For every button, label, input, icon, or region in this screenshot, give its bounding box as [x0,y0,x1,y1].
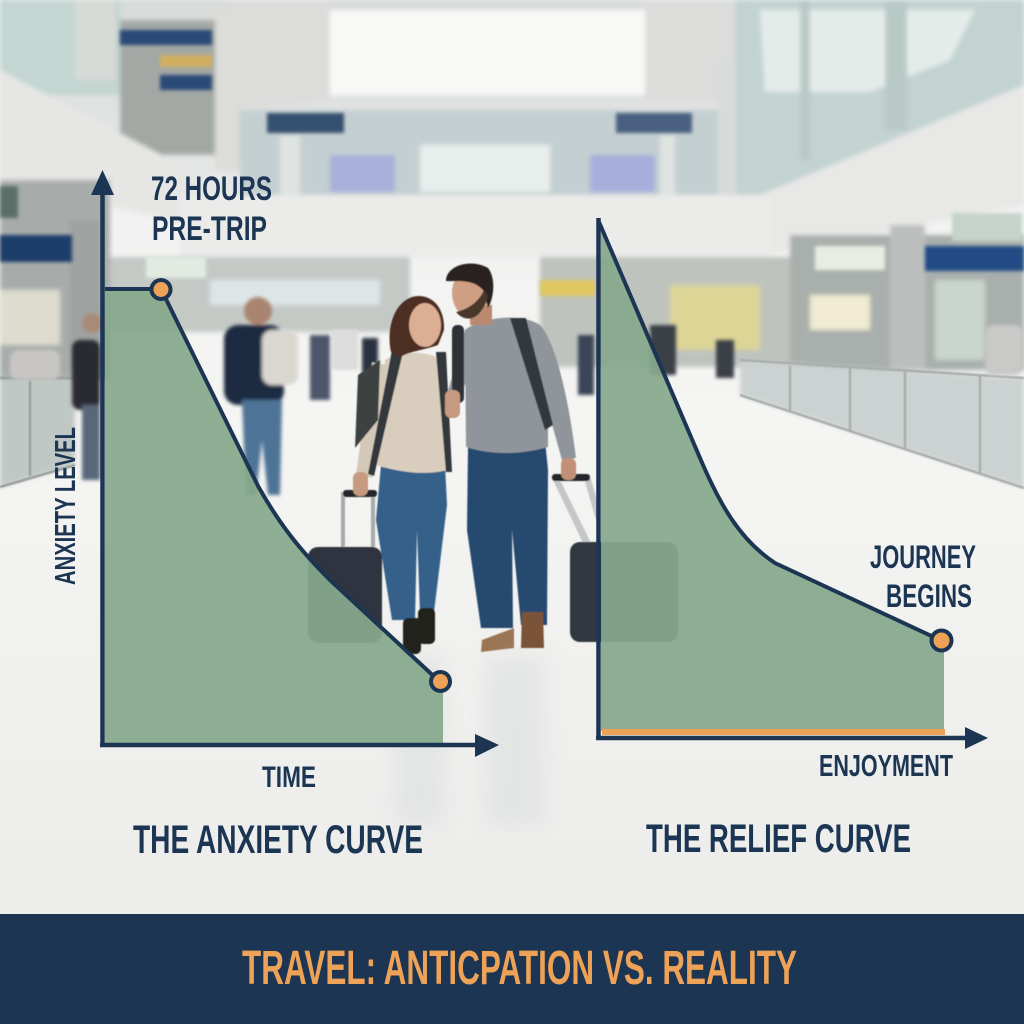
label: time: TIME [262,761,316,794]
background travellers [10,297,1023,495]
woman's suitcase [308,490,382,643]
railing left [0,378,75,487]
label: 72 hours pre-trip: PRE-TRIP [152,210,267,248]
axes with arrows [91,170,499,757]
chart: the anxiety curve [50,170,499,862]
label: 72 hours pre-trip: 72 HOURS [151,170,272,208]
axes with arrows [596,218,988,749]
man's suitcase [552,474,678,642]
marker: end of anxiety [431,672,450,691]
label: enjoyment: ENJOYMENT [819,748,953,783]
label: journey begins: BEGINS [886,578,972,614]
area: anxiety curve fill [105,289,443,743]
couple with luggage [308,264,678,654]
marker: start of anxiety [152,280,170,299]
line: relief curve [599,222,940,640]
heading: the relief curve: THE RELIEF CURVE [646,817,911,861]
baseline: enjoyment [602,729,945,735]
banner [0,914,1024,1024]
marker: journey begins [932,630,952,650]
label: 72 hours pre-trip [151,170,272,248]
chart: the relief curve [596,218,988,861]
area: relief curve fill [601,226,944,731]
woman [353,296,460,654]
label: journey begins: JOURNEY [870,539,976,575]
label: journey begins [870,539,976,614]
floor reflection [395,655,545,825]
railing right [740,360,1024,488]
line: anxiety curve [105,289,440,682]
label: anxiety level: ANXIETY LEVEL [50,427,82,585]
man [446,264,576,652]
heading: the anxiety curve: THE ANXIETY CURVE [133,818,423,862]
background signs [0,30,1024,296]
